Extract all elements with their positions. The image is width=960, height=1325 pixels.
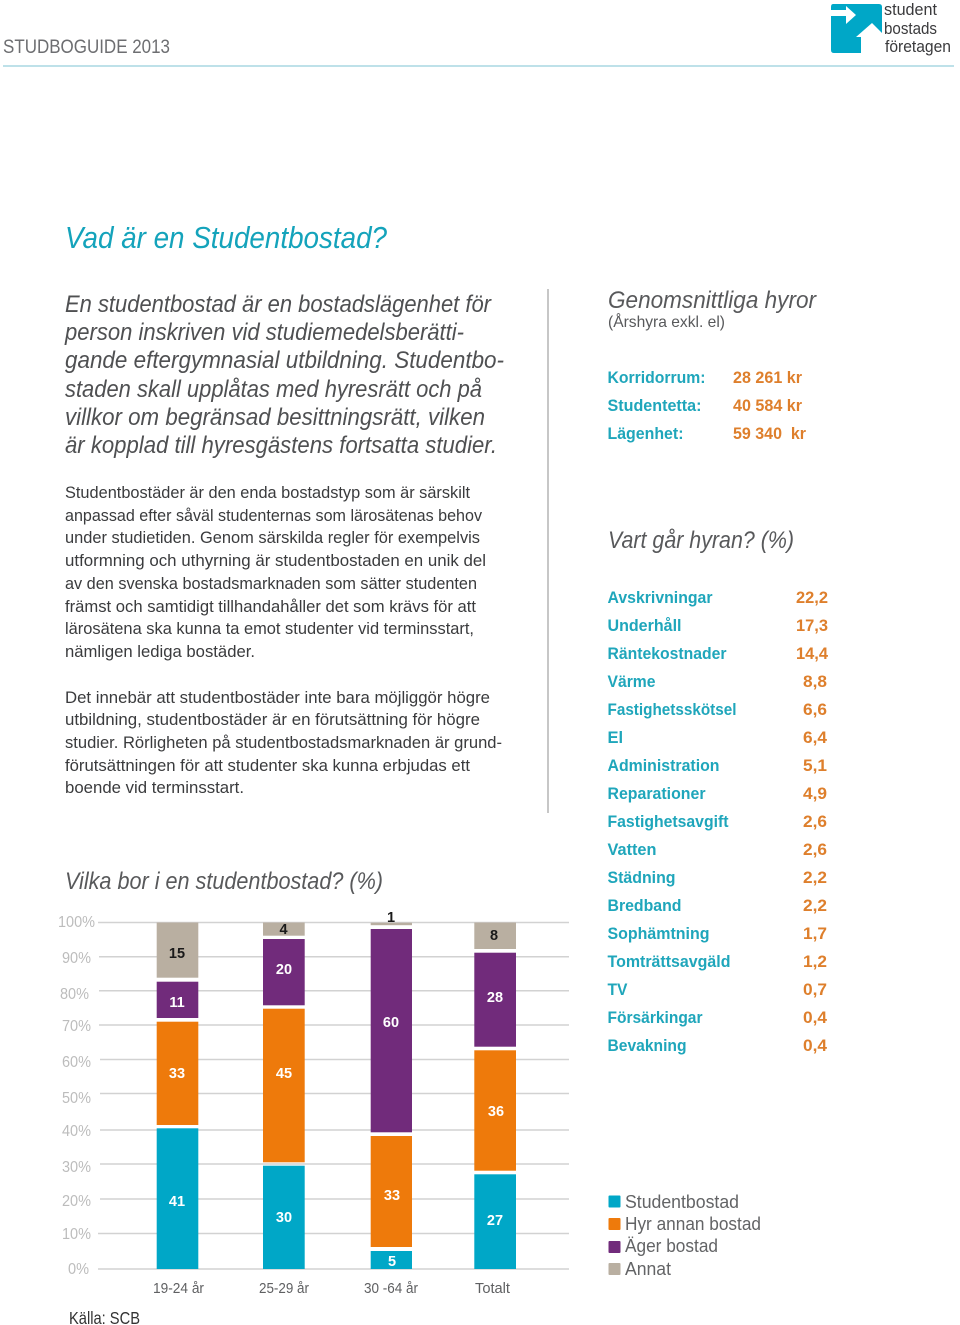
rent row: Lägenhet: Lägenhet: bbox=[608, 425, 684, 443]
legend bbox=[608, 1191, 761, 1279]
legend item: Äger bostad: Äger bostad bbox=[625, 1235, 718, 1256]
y axis labels: 20% bbox=[62, 1193, 91, 1210]
rent breakdown table: Fastighetsskötsel bbox=[608, 701, 736, 719]
logo wordmark: student bbox=[884, 0, 937, 19]
rent breakdown table: 5,1 bbox=[803, 757, 827, 775]
rent breakdown table: Avskrivningar bbox=[608, 589, 713, 607]
bar: 19-24 år: 15 bbox=[169, 946, 185, 962]
title: Vad är en Studentbostad? bbox=[65, 220, 388, 255]
body paragraph 1 bbox=[65, 483, 486, 661]
bar: Totalt: 8 bbox=[490, 928, 498, 944]
lead paragraph: gande eftergymnasial utbildning. Studentbo- bbox=[65, 347, 504, 374]
y axis labels: 0% bbox=[68, 1261, 89, 1278]
legend item: Annat: Annat bbox=[625, 1258, 671, 1279]
header rule bbox=[3, 65, 954, 67]
bar: 30-64 år: 1 bbox=[387, 910, 395, 926]
bar: 25-29 år: 20 bbox=[276, 962, 292, 978]
x axis labels: 19-24 år bbox=[153, 1280, 204, 1297]
rent breakdown table: Städning bbox=[608, 869, 676, 887]
rent breakdown table: Tomträttsavgäld bbox=[608, 953, 730, 971]
heading: where the rent goes: Vart går hyran? (%) bbox=[608, 527, 794, 554]
rent row: Korridorrum bbox=[608, 369, 803, 387]
body paragraph 2: Det innebär att studentbostäder inte bara möjliggör högre bbox=[65, 688, 490, 707]
body paragraph 2 bbox=[65, 688, 502, 797]
bar: 30-64 år: 60 bbox=[383, 1015, 399, 1031]
running title: STUDBOGUIDE 2013 bbox=[3, 36, 170, 58]
legend item: Studentbostad: Studentbostad bbox=[625, 1191, 739, 1212]
lead paragraph bbox=[64, 291, 504, 459]
rent breakdown table: Underhåll bbox=[608, 617, 682, 635]
body paragraph 1: utformning och uthyrning är studentbostaden en unik del bbox=[65, 551, 486, 570]
rent row: Studentetta bbox=[608, 397, 803, 415]
rent breakdown table: TV bbox=[608, 981, 628, 999]
x axis labels: Totalt bbox=[475, 1280, 511, 1297]
y axis labels: 30% bbox=[62, 1159, 91, 1176]
rent breakdown table: 2,2 bbox=[803, 897, 827, 915]
rent row: Lägenhet: 59 340 kr bbox=[733, 425, 807, 443]
y axis labels: 40% bbox=[62, 1123, 91, 1140]
rent breakdown table: Reparationer bbox=[608, 785, 706, 803]
rent breakdown table: 6,4 bbox=[803, 729, 828, 747]
y axis labels: 50% bbox=[62, 1090, 91, 1107]
panel: average rents bbox=[608, 287, 817, 443]
icon: arrow and house mark bbox=[831, 4, 882, 53]
rent breakdown table: Värme bbox=[608, 673, 656, 691]
rent breakdown table bbox=[608, 589, 829, 1055]
x axis labels: 30 -64 år bbox=[364, 1280, 418, 1297]
lead paragraph: villkor om begränsad besittningsrätt, vilken bbox=[65, 404, 485, 431]
bar: Totalt: 27 bbox=[487, 1213, 503, 1229]
bar: 25-29 år bbox=[263, 922, 305, 1269]
bar: 19-24 år: 11 bbox=[169, 995, 185, 1011]
body paragraph 1: under studietiden. Genom särskilda regler för exempelvis bbox=[65, 528, 480, 547]
rent breakdown table: El bbox=[608, 729, 623, 747]
body paragraph 1: nämligen lediga bostäder. bbox=[65, 642, 255, 661]
lead paragraph: staden skall upplåtas med hyresrätt och på bbox=[65, 376, 482, 403]
y axis labels: 10% bbox=[62, 1226, 91, 1243]
rent breakdown table: Bevakning bbox=[608, 1037, 686, 1055]
bar: 19-24 år bbox=[157, 922, 198, 1269]
logo wordmark: bostads bbox=[884, 19, 937, 38]
bar: 30-64 år bbox=[371, 910, 412, 1270]
rent breakdown table: 2,6 bbox=[803, 813, 827, 831]
rent breakdown table: 2,6 bbox=[803, 841, 827, 859]
bar: 25-29 år: 30 bbox=[276, 1210, 292, 1226]
rent breakdown table: 2,2 bbox=[803, 869, 827, 887]
rent breakdown table: 0,7 bbox=[803, 981, 827, 999]
body paragraph 1: Studentbostäder är den enda bostadstyp som är särskilt bbox=[65, 483, 470, 502]
body paragraph 1: främst och samtidigt tillhandahåller det som krävs för att bbox=[65, 597, 476, 616]
y axis labels: 70% bbox=[62, 1018, 91, 1035]
logo wordmark bbox=[884, 0, 951, 56]
rent row: Lägenhet bbox=[608, 425, 807, 443]
body paragraph 1: anpassad efter såväl studenternas som lärosätenas behov bbox=[65, 506, 482, 525]
rent breakdown table: 1,7 bbox=[803, 925, 827, 943]
y axis labels: 100% bbox=[58, 914, 95, 931]
rent breakdown table: 8,8 bbox=[803, 673, 827, 691]
rent breakdown table: 0,4 bbox=[803, 1009, 828, 1027]
panel: where the rent goes bbox=[608, 527, 829, 1055]
rent breakdown table: 0,4 bbox=[803, 1037, 828, 1055]
logo bbox=[831, 0, 951, 56]
rent breakdown table: 6,6 bbox=[803, 701, 827, 719]
rent breakdown table: 22,2 bbox=[796, 589, 828, 607]
x axis labels: 25-29 år bbox=[259, 1280, 309, 1297]
rent breakdown table: Vatten bbox=[608, 841, 656, 859]
rent breakdown table: Försärkingar bbox=[608, 1009, 703, 1027]
lead paragraph: En studentbostad är en bostadslägenhet för bbox=[65, 291, 492, 318]
body paragraph 2: förutsättningen för att studenter ska kunna erbjudas ett bbox=[65, 756, 470, 775]
heading: who lives in student housing: Vilka bor i en studentbostad? (%) bbox=[65, 868, 383, 895]
rent row: Studentetta: 40 584 kr bbox=[733, 397, 803, 415]
y axis labels bbox=[58, 914, 95, 1278]
bar: Totalt bbox=[474, 922, 516, 1269]
bar: Totalt: 36 bbox=[488, 1104, 504, 1120]
lead paragraph: person inskriven vid studiemedelsberätti- bbox=[64, 319, 464, 346]
rent breakdown table: 17,3 bbox=[796, 617, 828, 635]
logo wordmark: företagen bbox=[885, 37, 951, 56]
y axis labels: 90% bbox=[62, 950, 91, 967]
body paragraph 2: studier. Rörligheten på studentbostadsmarknaden är grund- bbox=[65, 733, 502, 752]
bar: 19-24 år: 33 bbox=[169, 1066, 185, 1082]
rent breakdown table: Fastighetsavgift bbox=[608, 813, 729, 831]
bar: Totalt: 28 bbox=[487, 990, 503, 1006]
rent breakdown table: 14,4 bbox=[796, 645, 829, 663]
legend item: Hyr annan bostad: Hyr annan bostad bbox=[625, 1213, 761, 1234]
rent breakdown table: Sophämtning bbox=[608, 925, 710, 943]
column divider bbox=[547, 289, 549, 813]
body paragraph 2: utbildning, studentbostäder är en förutsättning för högre bbox=[65, 710, 480, 729]
bar: 25-29 år: 45 bbox=[276, 1066, 292, 1082]
x axis labels bbox=[153, 1280, 511, 1297]
rent breakdown table: Räntekostnader bbox=[608, 645, 727, 663]
rent row: Studentetta: Studentetta: bbox=[608, 397, 702, 415]
bar: 30-64 år: 33 bbox=[384, 1188, 400, 1204]
rent row: Korridorrum: Korridorrum: bbox=[608, 369, 706, 387]
body paragraph 2: boende vid terminsstart. bbox=[65, 778, 244, 797]
bar: 19-24 år: 41 bbox=[169, 1194, 185, 1210]
subheading: (Årshyra exkl. el) bbox=[608, 312, 725, 331]
rent row: Korridorrum: 28 261 kr bbox=[733, 369, 803, 387]
rent breakdown table: Administration bbox=[608, 757, 720, 775]
bar: 25-29 år: 4 bbox=[279, 922, 288, 938]
body paragraph 1: av den svenska bostadsmarknaden som sätter studenten bbox=[65, 574, 477, 593]
bar chart bbox=[58, 910, 569, 1297]
y axis labels: 80% bbox=[60, 986, 89, 1003]
heading: average rents: Genomsnittliga hyror bbox=[608, 287, 817, 314]
rent breakdown table: Bredband bbox=[608, 897, 682, 915]
lead paragraph: är kopplad till hyresgästens fortsatta studier. bbox=[65, 432, 497, 459]
rent breakdown table: 4,9 bbox=[803, 785, 827, 803]
rent breakdown table: 1,2 bbox=[803, 953, 827, 971]
body paragraph 1: lärosätena ska kunna ta emot studenter vid terminsstart, bbox=[65, 619, 474, 638]
bar: 30-64 år: 5 bbox=[388, 1254, 396, 1270]
y axis labels: 60% bbox=[62, 1054, 91, 1071]
